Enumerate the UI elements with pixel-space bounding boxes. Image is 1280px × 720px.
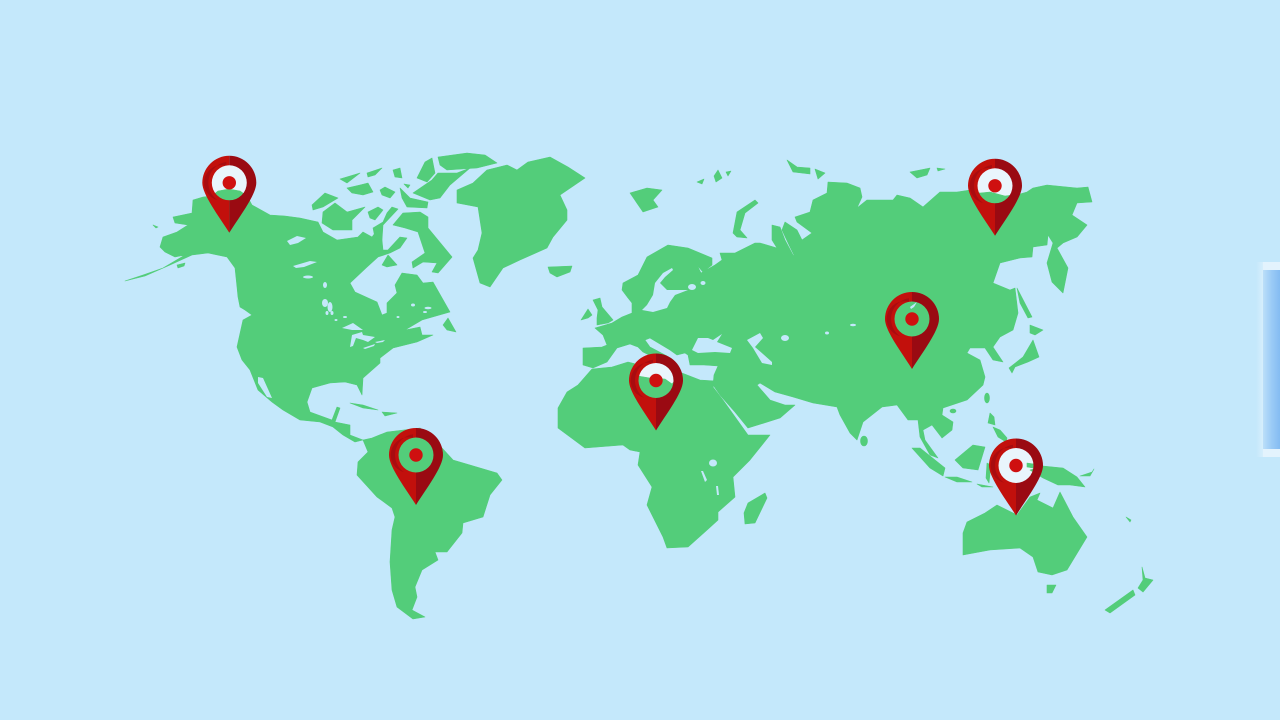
Japan and Sakhalin — [1009, 288, 1043, 373]
Madagascar — [744, 493, 767, 524]
blue side bar at right edge — [1256, 262, 1280, 457]
New Zealand — [1105, 567, 1153, 613]
Australia — [963, 492, 1087, 575]
New Guinea — [1030, 466, 1085, 487]
inland seas and lakes — [258, 236, 917, 495]
Southeast Asia islands — [860, 393, 1034, 487]
pin: South America — [389, 428, 443, 505]
pin: Africa — [629, 354, 683, 430]
Africa — [558, 362, 770, 548]
pin: Australia and Indonesia — [989, 438, 1043, 516]
Britain and Ireland — [581, 298, 613, 325]
Eurasia — [583, 182, 1092, 458]
pale disks behind the pin holes — [211, 165, 1034, 484]
Arctic Eurasia islands — [630, 160, 945, 238]
Pacific islands — [1080, 469, 1131, 522]
Iceland — [548, 266, 572, 277]
Arctic Canada islands — [153, 153, 497, 332]
pin: Siberia — [968, 159, 1022, 236]
pin: Central Asia — [885, 292, 939, 369]
North America — [125, 189, 450, 442]
Caribbean islands — [350, 403, 397, 416]
pin: Alaska — [202, 156, 256, 233]
South America — [357, 428, 502, 619]
world map — [125, 153, 1153, 619]
Tasmania — [1047, 585, 1056, 593]
Greenland — [457, 157, 585, 287]
